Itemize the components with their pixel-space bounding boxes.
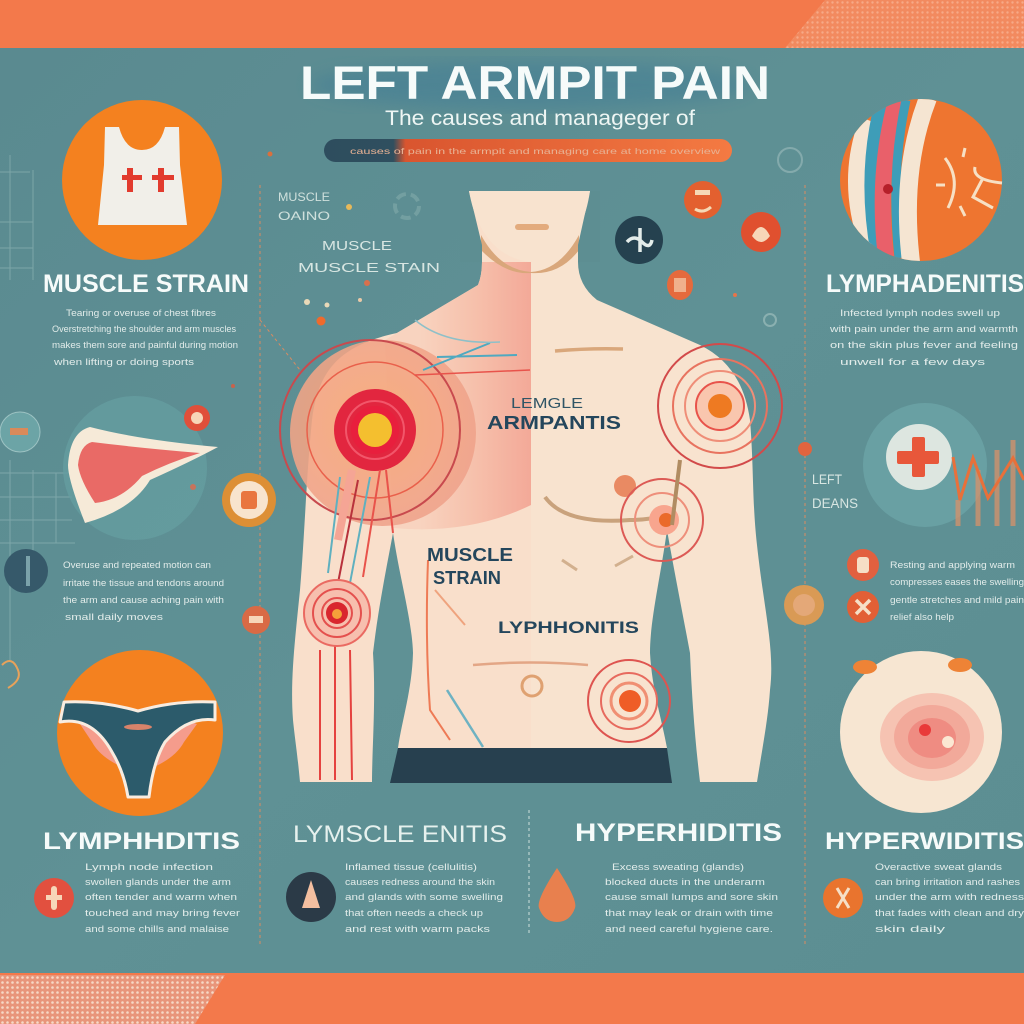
neck band: [481, 235, 579, 273]
chart: [953, 440, 1024, 526]
text block: Overstretching the shoulder and arm muscles: [52, 324, 236, 335]
icon: garment: [57, 650, 223, 816]
heading: LYMSCLE ENITIS: [293, 821, 507, 848]
torso left half: [292, 191, 531, 782]
text block: Inflamed tissue (cellulitis): [345, 862, 477, 873]
chest line: [545, 497, 665, 521]
small labels top left: OAINO: [278, 209, 330, 223]
label: muscle strain stack: MUSCLE STAIN: [298, 260, 440, 275]
text block: and some chills and malaise: [85, 924, 229, 935]
text block: can bring irritation and rashes: [875, 877, 1020, 888]
decorative far-left icon: [2, 661, 19, 688]
banner bar: [324, 139, 732, 162]
icon: skin patch: [840, 651, 1002, 813]
small circles: [0, 384, 276, 634]
title block: [300, 56, 770, 109]
label: lyphhonitis: LYPHHONITIS: [498, 618, 639, 637]
heading: LEFT ARMPIT PAIN: [300, 56, 770, 109]
text block: unwell for a few days: [840, 357, 985, 368]
pain target: right shoulder: [658, 344, 782, 468]
label: muscle strain stack: MUSCLE: [322, 238, 392, 253]
icon: medical cross: [863, 403, 987, 527]
body labels: [427, 395, 639, 637]
panel: muscle strain top left: [43, 100, 249, 368]
pain target: abdomen: [588, 660, 670, 742]
text block: left middle: [63, 560, 224, 623]
blood vessels: [320, 320, 530, 780]
text block: compresses eases the swelling: [890, 577, 1024, 588]
icon: drop: [539, 868, 575, 922]
panel: lymph icon bottom left: [34, 650, 240, 935]
text block: and glands with some swelling: [345, 892, 503, 903]
text block: swollen glands under the arm: [85, 877, 231, 888]
text block: blocked ducts in the underarm: [605, 877, 765, 888]
text block: [85, 862, 240, 935]
label: muscle strain stack: [298, 238, 440, 275]
text block: [345, 862, 503, 935]
label: LEFT: [812, 471, 842, 487]
icon: orange badge: [823, 878, 863, 918]
top right small icons: [615, 181, 781, 300]
text block: left middle: the arm and cause aching pain with: [63, 595, 224, 606]
icon: dark badge: [286, 872, 336, 922]
small decorative marks near head: [268, 148, 802, 326]
text block: [890, 560, 1024, 623]
panel: hyperwiditis bottom right: [823, 651, 1024, 935]
panel: right middle icon and chart: [784, 403, 1024, 625]
subtitle: The causes and manageger of: [385, 107, 695, 130]
text block: [875, 862, 1024, 935]
body figure: [292, 191, 771, 783]
panel: liver illustration: [0, 384, 276, 634]
banner bar: causes of pain in the armpit and managing care at home overview: [350, 146, 721, 156]
heading: LYMPHHDITIS: [43, 828, 240, 855]
text block: Infected lymph nodes swell up: [840, 308, 1000, 319]
small labels top left: [278, 190, 330, 223]
shape: organ: [68, 427, 218, 523]
text block: relief also help: [890, 612, 954, 623]
text block: Overactive sweat glands: [875, 862, 1002, 873]
text block: causes redness around the skin: [345, 877, 495, 888]
label: [812, 471, 858, 511]
pain target: right side chest: [614, 460, 703, 561]
text block: often tender and warm when: [85, 892, 237, 903]
label: DEANS: [812, 495, 858, 511]
text block: and rest with warm packs: [345, 924, 490, 935]
heading: MUSCLE STRAIN: [43, 270, 249, 298]
text block: Resting and applying warm: [890, 560, 1015, 571]
panel: lymphadenitis top right: [826, 98, 1024, 368]
text block: [605, 862, 778, 935]
text block: Lymph node infection: [85, 862, 213, 873]
icon: vessels: [840, 98, 1002, 262]
label: armpantis: ARMPANTIS: [487, 413, 621, 433]
text block: that often needs a check up: [345, 908, 483, 919]
text block: with pain under the arm and warmth: [829, 324, 1018, 335]
text block: that may leak or drain with time: [605, 908, 773, 919]
text block: when lifting or doing sports: [53, 357, 194, 368]
text block: Tearing or overuse of chest fibres: [66, 308, 216, 319]
text block: [52, 308, 238, 368]
background grids: [0, 155, 75, 660]
torso right half: [531, 191, 771, 782]
text block: under the arm with redness: [875, 892, 1024, 903]
text block: cause small lumps and sore skin: [605, 892, 778, 903]
text block: left middle: irritate the tissue and tendons around: [63, 578, 224, 589]
text block: left middle: small daily moves: [65, 612, 163, 623]
text block: touched and may bring fever: [85, 908, 240, 919]
mouth: [515, 224, 549, 230]
heading: LYMPHADENITIS: [826, 270, 1024, 298]
text block: left middle: Overuse and repeated motion can: [63, 560, 211, 571]
text block: makes them sore and painful during motion: [52, 340, 238, 351]
label: lemgle: LEMGLE: [511, 395, 583, 412]
text block: skin daily: [875, 924, 945, 935]
icon: red badge: [741, 212, 781, 252]
icon: small orange badge: [667, 270, 693, 300]
pain target: left arm: [304, 580, 370, 646]
background cutouts beside the jaw: [460, 191, 600, 262]
chest pink shading: [385, 262, 531, 529]
icon: red badge: [34, 878, 74, 918]
small labels top left: MUSCLE: [278, 190, 330, 204]
panel: hyperhiditis: [539, 819, 782, 935]
small badges: [784, 442, 879, 625]
face: [469, 191, 590, 262]
collar bone: [555, 349, 623, 351]
heading: HYPERWIDITIS: [825, 828, 1024, 855]
text block: [829, 308, 1018, 368]
dashed dividers: [260, 185, 805, 945]
navel: [522, 676, 542, 696]
text block: gentle stretches and mild pain: [890, 595, 1024, 606]
text block: on the skin plus fever and feeling: [830, 340, 1018, 351]
icon: dark badge: [615, 216, 663, 264]
shorts: [390, 748, 672, 783]
icon: tank top on orange: [62, 100, 222, 260]
heading: HYPERHIDITIS: [575, 819, 782, 847]
icon: orange badge: [684, 181, 722, 219]
panel: lymscle enitis: [286, 821, 507, 935]
text block: Excess sweating (glands): [612, 862, 744, 873]
waist line: [473, 662, 588, 665]
label: muscle: MUSCLE: [427, 545, 513, 565]
text block: that fades with clean and dry: [875, 908, 1024, 919]
pain target: shoulder: [280, 340, 476, 526]
text block: and need careful hygiene care.: [605, 924, 773, 935]
label: strain: STRAIN: [433, 568, 501, 588]
